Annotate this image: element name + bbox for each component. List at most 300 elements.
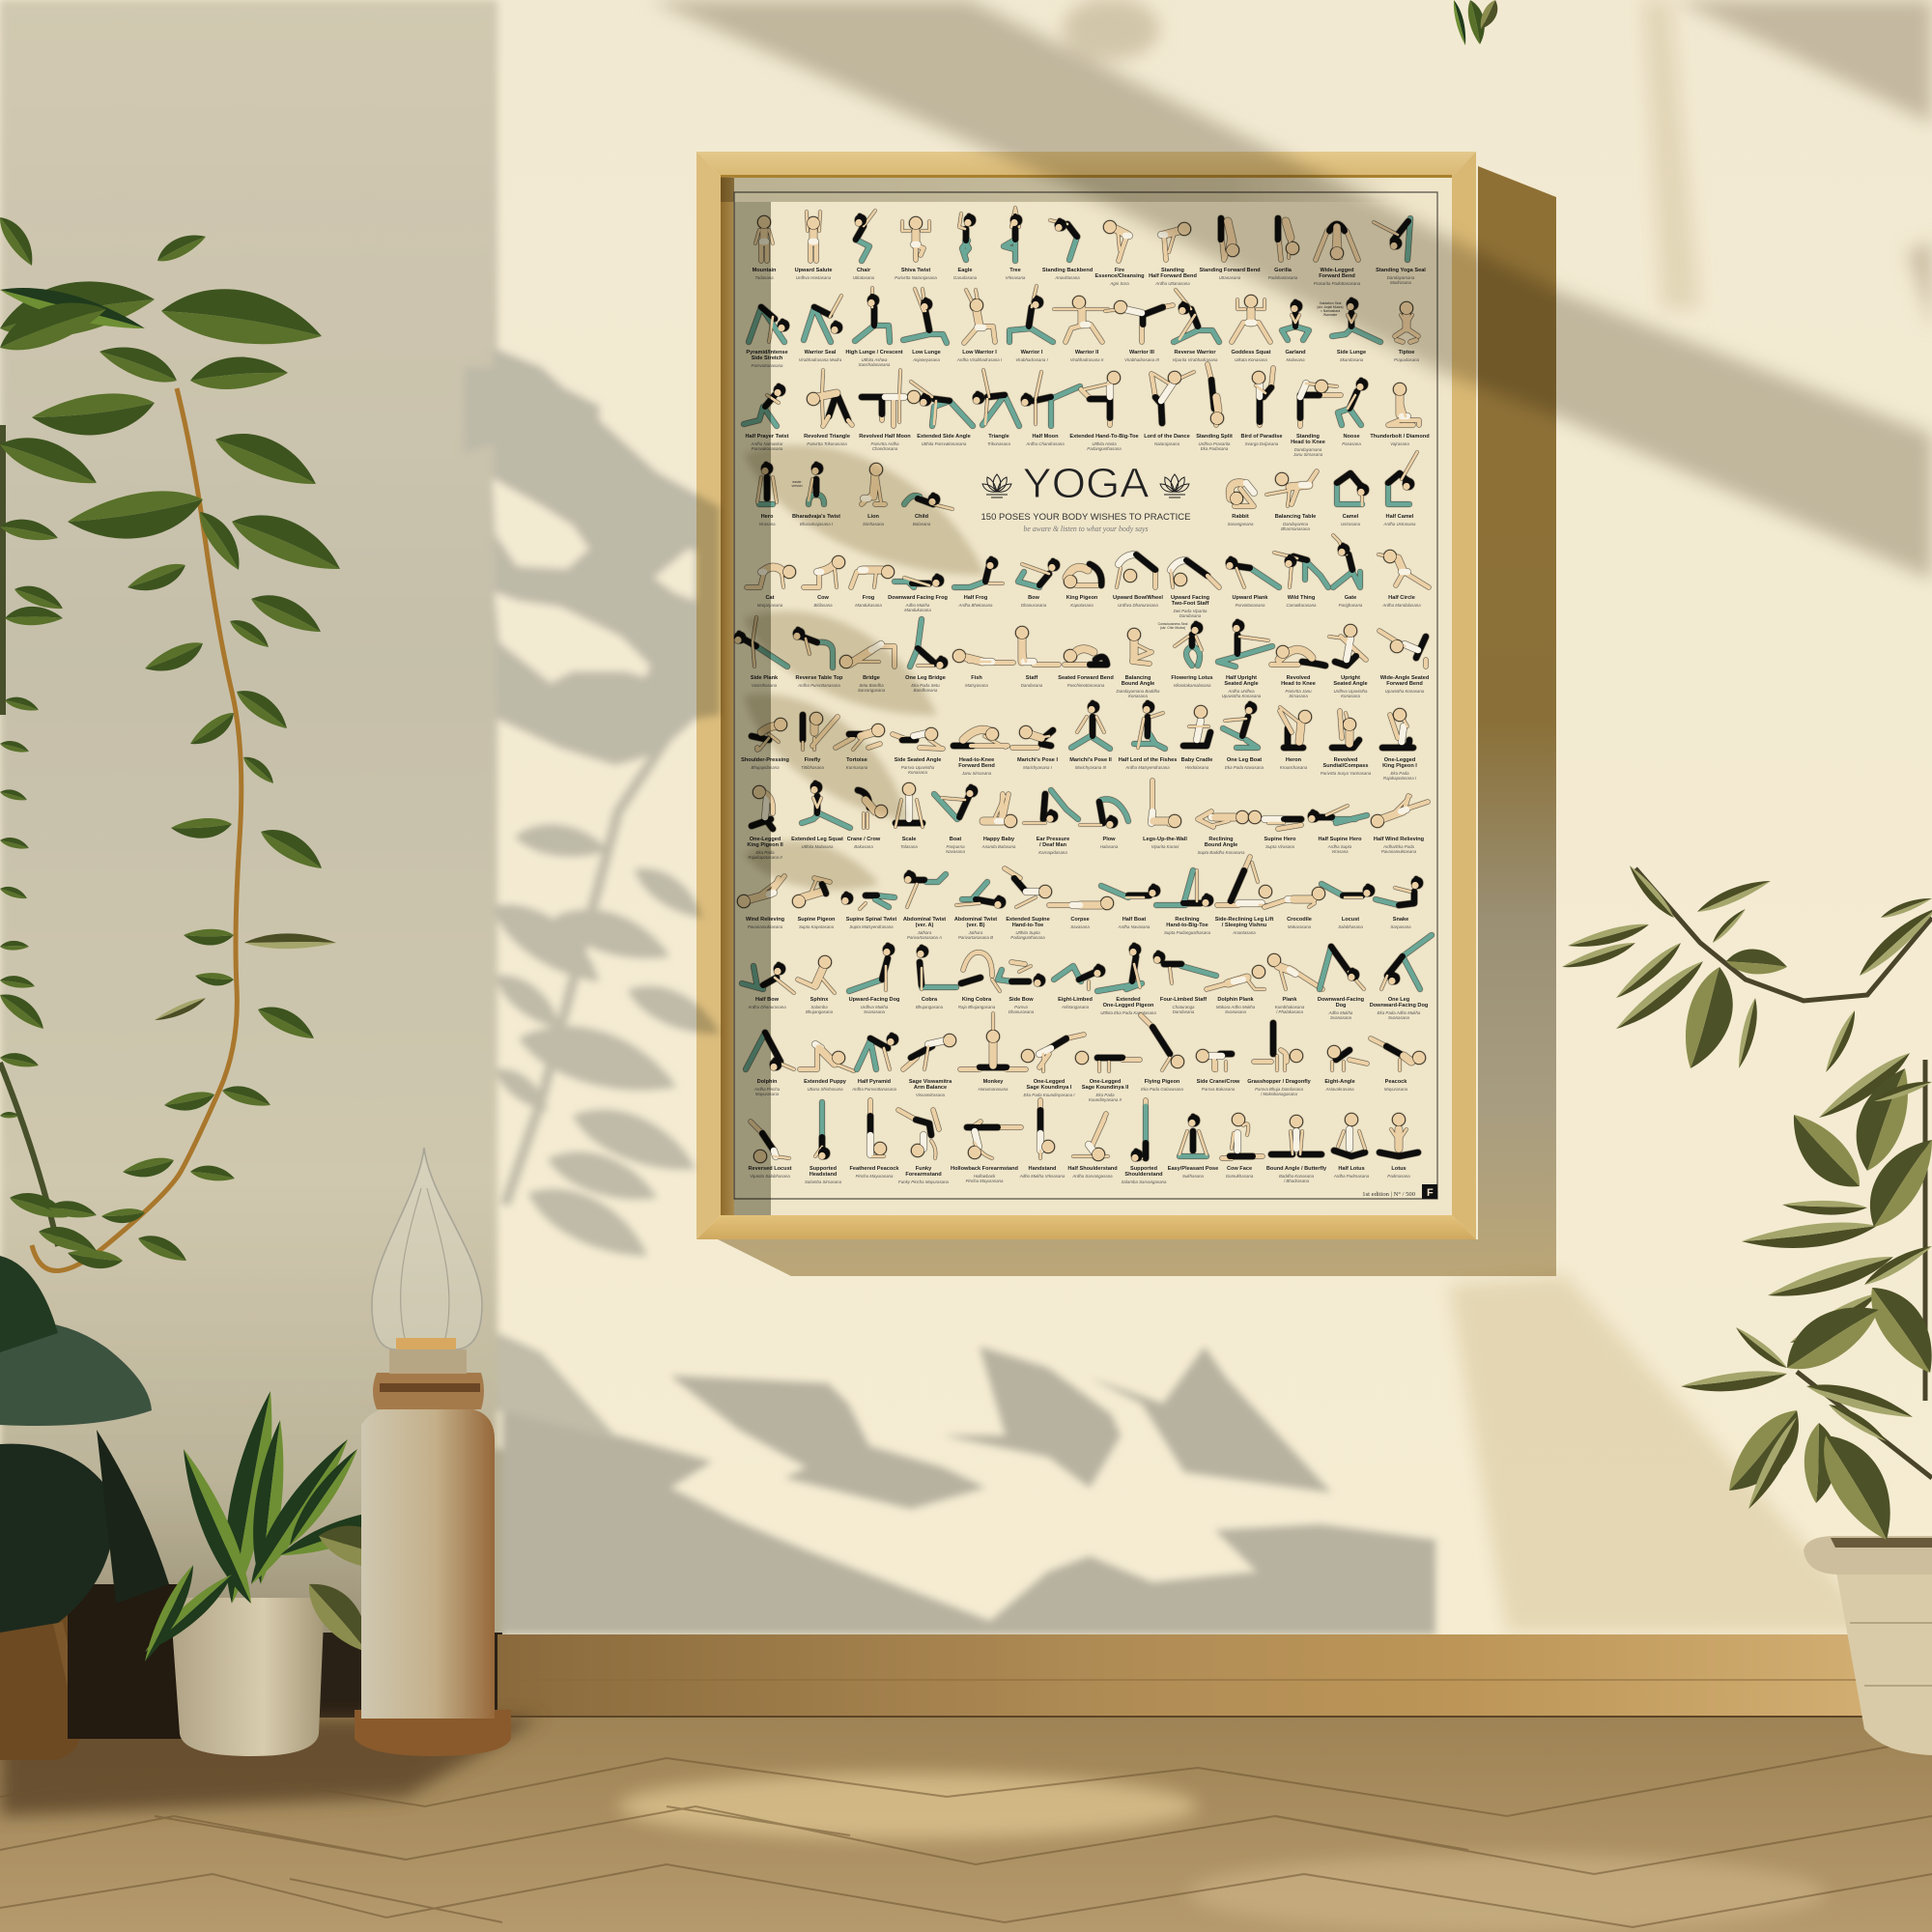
- pose: Wind Relieving: Wind Relieving: [746, 917, 785, 923]
- pose: Bound Angle / Butterfly: Baddha Konasana: [1279, 1174, 1315, 1179]
- pose: Side Seated Angle: Konasana: [908, 770, 927, 775]
- lamp column: [355, 1148, 511, 1756]
- large grey-green leaf: [0, 1321, 152, 1426]
- pose: Revolved Half Moon: [859, 370, 920, 451]
- pose: Thunderbolt / Diamond: [1370, 383, 1430, 446]
- pose: Standing Backbend: [1042, 218, 1094, 280]
- pose: Hollowback Forearmstand: Hollowback: [974, 1174, 996, 1179]
- pose: Triangle: Triangle: [988, 434, 1009, 440]
- pose: Half Pyramid: Ardha Parsvottanasana: [851, 1087, 897, 1092]
- pose: Downward-Facing Dog: Adho Mukha: [1328, 1010, 1353, 1015]
- pose: Revolved Half Moon: Parivrtta Ardha: [870, 441, 899, 446]
- pose: Goddess Squat: Utkata Konasana: [1235, 357, 1267, 362]
- pose: Supine Hero: [1248, 811, 1301, 849]
- pose: Balancing Table: [1266, 471, 1317, 531]
- pose: Bird of Paradise: Svarga Dvijasana: [1245, 441, 1279, 446]
- pose: Funky Forearmstand: Forearmstand: [905, 1172, 942, 1178]
- pose: Lotus: Padmasana: [1387, 1174, 1410, 1179]
- pose: Handstand: Handstand: [1029, 1166, 1057, 1172]
- frame left recess: [721, 177, 734, 1215]
- pose: Half Boat: Ardha Navasana: [1118, 924, 1151, 929]
- pose: Heron: [1280, 707, 1312, 770]
- annotation: salutation seal: [1317, 301, 1344, 317]
- pose: Extended Side Angle: Utthita Parsvakonasana: [922, 441, 967, 446]
- pose: Hollowback Forearmstand: Hollowback Forearmstand: [951, 1166, 1019, 1172]
- pose: Funky Forearmstand: [898, 1110, 950, 1184]
- pose: Chair: Chair: [857, 268, 871, 273]
- pose: Marichi's Pose II: [1069, 700, 1112, 770]
- poster paper: [734, 178, 1452, 1215]
- pose: Flying Pigeon: [1141, 1015, 1184, 1092]
- small hanging leaf at top: [1451, 0, 1502, 46]
- pose: Flowering Lotus: Vikasitakamalasana: [1174, 683, 1211, 688]
- pose: Gate: Gate: [1345, 595, 1356, 601]
- pose: Warrior I: Virabhadrasana I: [1015, 357, 1048, 362]
- pose: Revolved Sundial/Compass: [1321, 711, 1372, 776]
- pot rim: [1804, 1536, 1932, 1575]
- pose: Frog: Mandukasana: [855, 603, 882, 608]
- pose: Side-Reclining Leg Lift / Sleeping Vishnu: [1215, 857, 1273, 935]
- pose: Tiptoe: Tiptoe: [1399, 350, 1414, 355]
- pose: Reclining Bound Angle: Bound Angle: [1205, 842, 1237, 848]
- pose: One-Legged Sage Koundinya II: Sage Koundinya II: [1082, 1085, 1129, 1091]
- pose: Upward-Facing Dog: Upward-Facing Dog: [849, 997, 900, 1003]
- pose: One Leg Bridge: [905, 619, 948, 693]
- pose: Hollowback Forearmstand: [951, 1122, 1021, 1183]
- pose: Standing Yoga Seal: Standing Yoga Seal: [1376, 268, 1426, 273]
- pose: Half Wind Relieving: Half Wind Relieving: [1374, 837, 1425, 842]
- pose: Bow: [1018, 558, 1060, 608]
- pose: Revolved Sundial/Compass: Sundial/Compass: [1323, 763, 1368, 769]
- pose: Sage Viswamitra Arm Balance: Visvamitrasana: [916, 1093, 946, 1097]
- pose: Side Bow: Side Bow: [1009, 997, 1034, 1003]
- pose: Pyramid/Intense Side Stretch: Parsvottanasana: [752, 363, 783, 368]
- pose: One-Legged Sage Koundinya I: Sage Koundinya I: [1027, 1085, 1072, 1091]
- pose: Peacock: [1371, 1038, 1426, 1092]
- pose: Hollowback Forearmstand: Pincha Mayurasana: [966, 1179, 1004, 1183]
- pose: Marichi's Pose II: Marichi's Pose II: [1069, 757, 1112, 763]
- pose: Standing Half Forward Bend: Half Forward Bend: [1149, 273, 1197, 279]
- lower dark leaf: [97, 1430, 169, 1604]
- pose: Reclining Bound Angle: Supta Baddha Konasana: [1198, 850, 1245, 855]
- pose: Half Boat: [1101, 884, 1160, 929]
- pose: Dolphin: [746, 1033, 794, 1096]
- pose: Upright Seated Angle: Urdhva Upavistha: [1334, 689, 1368, 694]
- leaf shadows on the wall: [0, 0, 1435, 1642]
- pose: High Lunge / Crescent: Sanchalanasana: [859, 362, 891, 367]
- pose: Four-Limbed Staff: Four-Limbed Staff: [1160, 997, 1207, 1003]
- pose: Wide-Angle Seated Forward Bend: Wide-Angle Seated: [1380, 675, 1430, 681]
- pose: One-Legged King Pigeon II: Eka Pada: [755, 850, 775, 855]
- pose: Standing Head to Knee: Janu Sirsasana: [1293, 452, 1323, 457]
- pose: Cow Face: Cow Face: [1227, 1166, 1252, 1172]
- floor light patch: [618, 1774, 1198, 1839]
- pose: Side Bow: [998, 962, 1045, 1014]
- pose: Mountain: Mountain: [753, 268, 777, 273]
- pose: Half Wind Relieving: [1372, 796, 1428, 854]
- pose: Scale: Scale: [902, 837, 916, 842]
- pose: Grasshopper / Dragonfly: / Maksikanagasana: [1260, 1092, 1297, 1096]
- pose: Upward Facing Two-Foot Staff: Upward Facing: [1171, 595, 1210, 601]
- pose: Half Upright Seated Angle: [1218, 619, 1272, 698]
- pose: Crocodile: [1264, 887, 1325, 929]
- pose: Half Frog: Ardha Bhekasana: [958, 603, 993, 608]
- pose: Half Bow: [742, 962, 794, 1009]
- pose: Sphinx: [798, 956, 835, 1014]
- pose: Ear Pressure / Deaf Man: Ear Pressure: [1037, 837, 1069, 842]
- pose: Half Wind Relieving: Pavanamuktasana: [1381, 849, 1417, 854]
- pose: One Leg Downward-Facing Dog: Svanasana: [1388, 1015, 1410, 1020]
- pose: King Pigeon: Kapotasana: [1070, 603, 1094, 608]
- pose: Revolved Triangle: [804, 370, 852, 446]
- pose: King Cobra: [958, 952, 1000, 1009]
- pose: Wide-Legged Forward Bend: Forward Bend: [1319, 273, 1355, 279]
- poster inner shading: [721, 178, 1397, 1215]
- pose: Dolphin Plank: Svanasana: [1225, 1009, 1247, 1014]
- edition note: 1st edition | N° / 500: [1362, 1191, 1416, 1198]
- poster border line: [734, 192, 1437, 1199]
- vine stem: [32, 388, 242, 1271]
- lamp neck: [389, 1350, 467, 1374]
- wooden column: [361, 1409, 495, 1719]
- pose: Half Camel: [1383, 452, 1417, 526]
- plant leaves: [1560, 863, 1932, 1549]
- pose: Half Prayer Twist: Ardha Namaskar: [751, 441, 783, 446]
- pose: Eight-Limbed: Eight-Limbed: [1058, 997, 1093, 1003]
- pose: Tiptoe: [1394, 301, 1420, 362]
- pose: Warrior II: Virabhadrasana II: [1070, 357, 1104, 362]
- pose: Half Camel: Half Camel: [1386, 514, 1414, 520]
- pose: Half Pyramid: [851, 1033, 898, 1092]
- pose: Mountain: Tadasana: [754, 275, 774, 280]
- pose: Cobra: Bhujangasana: [916, 1005, 944, 1009]
- pose: Grasshopper / Dragonfly: Parsva Bhuja Dandasana: [1255, 1087, 1303, 1092]
- pose: Extended Supine Hand-to-Toe: Hand-to-Toe: [1012, 923, 1043, 928]
- pose: Extended Leg Squat: Extended Leg Squat: [791, 837, 843, 842]
- pose: Reverse Table Top: [793, 627, 843, 688]
- pose: Shoulder-Pressing: Shoulder-Pressing: [741, 757, 789, 763]
- pose: Standing Yoga Seal: [1374, 218, 1426, 285]
- pose: Marichi's Pose II: Marichyasana III: [1075, 765, 1107, 770]
- pose: Crane / Crow: [847, 790, 887, 849]
- pose: Extended Hand-To-Big-Toe: Utthita Hasta: [1092, 441, 1117, 446]
- pose: Side Plank: Side Plank: [751, 675, 779, 681]
- pose: Monkey: Hanumanasana: [978, 1087, 1009, 1092]
- pose: High Lunge / Crescent: [845, 288, 903, 367]
- pose: Warrior III: Warrior III: [1129, 350, 1154, 355]
- pose: Supported Shoulderstand: Shoulderstand: [1124, 1172, 1163, 1178]
- tagline: be aware & listen to what your body says: [1024, 525, 1148, 533]
- pose: Balancing Bound Angle: [1117, 628, 1160, 698]
- pose: Downward Facing Frog: Adho Mukha: [905, 603, 930, 608]
- collar dark ring: [380, 1383, 480, 1392]
- pose: Seated Forward Bend: Paschimottanasana: [1067, 683, 1105, 688]
- pose: Legs-Up-the-Wall: Legs-Up-the-Wall: [1143, 837, 1187, 842]
- pose: Frog: [851, 566, 895, 608]
- pose: Sphinx: Bhujangasana: [806, 1009, 834, 1014]
- pose: Warrior II: Warrior II: [1075, 350, 1099, 355]
- pose: Downward Facing Frog: Downward Facing Frog: [888, 595, 949, 601]
- pose: Noose: Noose: [1343, 434, 1360, 440]
- pose: Child: Balasana: [913, 522, 931, 526]
- pose: Extended One-Legged Pigeon: Utthita Eka Pada Kapotasana: [1100, 1010, 1156, 1015]
- pose: Warrior III: [1105, 301, 1173, 362]
- pose: Flowering Lotus: Flowering Lotus: [1171, 675, 1213, 681]
- pose: Eight-Angle: Eight-Angle: [1324, 1079, 1355, 1085]
- pose: Handstand: [1019, 1100, 1065, 1179]
- pose: Side Seated Angle: Parsva Upavistha: [901, 765, 935, 770]
- pose: Extended One-Legged Pigeon: Extended: [1116, 997, 1141, 1003]
- pose: Side Bow: Dhanurasana: [1009, 1009, 1035, 1014]
- pose: Head-to-Knee Forward Bend: [953, 728, 1008, 776]
- pose: Balancing Table: Balancing Table: [1275, 514, 1316, 520]
- large dark left leaves: [0, 1256, 169, 1633]
- pose: Baby Cradle: Hindolasana: [1185, 765, 1209, 770]
- pose: Upward Plank: Purvottanasana: [1236, 603, 1265, 608]
- lamp base: [355, 1710, 511, 1756]
- pose: Bharadvaja's Twist: [792, 462, 840, 526]
- pose: Extended Puppy: Uttana Shishosana: [807, 1087, 843, 1092]
- pose: King Pigeon: [1065, 564, 1101, 608]
- annotation: salutation seal: (skr. Anjali Mudra): [1317, 305, 1344, 309]
- pose: Locust: Locust: [1342, 917, 1359, 923]
- pose: Standing Half Forward Bend: Standing: [1161, 268, 1185, 273]
- pose: One-Legged King Pigeon II: Rajakapotasana II: [748, 855, 782, 860]
- pose: Flying Pigeon: Flying Pigeon: [1145, 1079, 1180, 1085]
- pose: Upright Seated Angle: Upright: [1341, 675, 1360, 681]
- pose: Supported Headstand: Salamba Sirsasana: [805, 1179, 842, 1184]
- pose: Side Lunge: Skandasana: [1340, 357, 1364, 362]
- pose: Head-to-Knee Forward Bend: Janu Sirsasana: [961, 771, 992, 776]
- pose: Upward-Facing Dog: [849, 943, 900, 1014]
- pose: Marichi's Pose I: Marichi's Pose I: [1017, 757, 1058, 763]
- pose: Funky Forearmstand: Funky: [916, 1166, 932, 1172]
- soft light band shadows across wall and poster: [651, 0, 1932, 1633]
- pose: Tree: Vrksasana: [1006, 275, 1026, 280]
- pose: Wild Thing: [1274, 553, 1328, 608]
- pose: Extended Hand-To-Big-Toe: Padangusthasana: [1087, 446, 1122, 451]
- pose: Standing Forward Bend: [1199, 218, 1261, 280]
- pose: Reclining Bound Angle: Reclining: [1208, 837, 1234, 842]
- pose: Firefly: [801, 713, 838, 770]
- pose: Extended Side Angle: [911, 382, 973, 446]
- pose: Abdominal Twist (ver. B): Parivartanasana B: [958, 935, 993, 940]
- pose: Half Supine Hero: Virasana: [1331, 849, 1349, 854]
- pose: Abdominal Twist (ver. A): Jathara: [917, 930, 932, 935]
- pose: Side-Reclining Leg Lift / Sleeping Vishnu: / Sleeping Vishnu: [1222, 923, 1267, 928]
- pose: Standing Split: Urdhva Prasarita: [1199, 441, 1231, 446]
- pose: Supine Spinal Twist: Supta Matsyendrasana: [849, 924, 894, 929]
- pose: One-Legged Sage Koundinya I: [1022, 1035, 1084, 1097]
- pose: Cow: [804, 556, 844, 608]
- pose: Camel: [1337, 473, 1369, 526]
- pose: Half Bow: Half Bow: [755, 997, 780, 1003]
- pose: Bound Angle / Butterfly: Bound Angle / Butterfly: [1266, 1166, 1327, 1172]
- pose: One-Legged Sage Koundinya II: Eka Pada: [1095, 1093, 1115, 1097]
- pose: Extended Puppy: Extended Puppy: [804, 1079, 847, 1085]
- pose: Cobra: [916, 945, 956, 1009]
- pose: Triangle: Trikonasana: [987, 441, 1010, 446]
- pot body: [1835, 1567, 1932, 1755]
- frame drop shadow on the wall: [718, 166, 1556, 1276]
- pose: Head-to-Knee Forward Bend: Head-to-Knee: [959, 757, 994, 763]
- pose: Shoulder-Pressing: Bhujapidasana: [751, 765, 780, 770]
- pose: Dolphin Plank: Makara Adho Mukha: [1216, 1005, 1256, 1009]
- pose: Revolved Head to Knee: Sirsasana: [1289, 694, 1308, 698]
- warm filament base: [396, 1338, 456, 1350]
- pose: Peacock: Mayurasana: [1384, 1087, 1408, 1092]
- pose: Marichi's Pose I: Marichyasana I: [1023, 765, 1053, 770]
- pose: Upward Salute: [795, 212, 832, 280]
- pose: Sphinx: Salamba: [810, 1005, 828, 1009]
- vine leaves: [30, 227, 350, 1272]
- pose: Lotus: [1379, 1113, 1418, 1179]
- pose: Supported Headstand: Supported: [810, 1166, 838, 1172]
- subtitle: 150 POSES YOUR BODY WISHES TO PRACTICE: [981, 512, 1190, 523]
- pose: Gorilla: Padahastasana: [1268, 275, 1298, 280]
- pose: Happy Baby: Happy Baby: [983, 837, 1015, 842]
- pose: Head-to-Knee Forward Bend: Forward Bend: [958, 763, 995, 769]
- pose: Firefly: Tittibhasana: [801, 765, 824, 770]
- pose: Half Moon: [1021, 372, 1080, 446]
- plant stems: [1635, 868, 1932, 1478]
- pose: Hero: Virasana: [758, 522, 776, 526]
- pose: Half Prayer Twist: [744, 384, 789, 451]
- pose: Lord of the Dance: Lord of the Dance: [1144, 434, 1190, 440]
- pose: One-Legged Sage Koundinya II: Koundinyasana II: [1089, 1097, 1122, 1102]
- pose: Noose: Pasasana: [1342, 441, 1361, 446]
- pose: Balancing Table: Dandayamna: [1283, 522, 1309, 526]
- pose: Corpse: Corpse: [1070, 917, 1090, 923]
- pose: Lion: Lion: [867, 514, 879, 520]
- pose: Side Crane/Crow: Side Crane/Crow: [1197, 1079, 1240, 1085]
- pose: Revolved Head to Knee: Parivrtta Janu: [1285, 689, 1312, 694]
- pose: Extended Puppy: [800, 1044, 854, 1092]
- pose: Standing Head to Knee: Dandayamana: [1294, 447, 1322, 452]
- pose: Side Crane/Crow: [1196, 1049, 1240, 1092]
- pose: Side Lunge: [1332, 298, 1380, 362]
- pose: Upward Salute: Upward Salute: [795, 268, 832, 273]
- pose: King Pigeon: King Pigeon: [1066, 595, 1098, 601]
- pose: Bridge: [840, 644, 895, 693]
- pose: Eight-Limbed: [1054, 964, 1105, 1009]
- pose: Thunderbolt / Diamond: Vajrasana: [1390, 441, 1409, 446]
- pose: Warrior II: [1054, 296, 1108, 362]
- pose: Standing Half Forward Bend: [1149, 222, 1197, 286]
- baseboard: [497, 1634, 1869, 1719]
- pose: Upward Facing Two-Foot Staff: Dandasana: [1179, 613, 1202, 618]
- pose: One-Legged Sage Koundinya II: [1076, 1051, 1140, 1102]
- publisher corner badge: [1422, 1184, 1437, 1199]
- pose: One-Legged Sage Koundinya I: One-Legged: [1034, 1079, 1065, 1085]
- pose: Side-Reclining Leg Lift / Sleeping Vishnu: Anantasana: [1232, 930, 1256, 935]
- pose: Corpse: [1049, 896, 1113, 929]
- pose: Hero: Hero: [761, 514, 774, 520]
- pose: Upward-Facing Dog: Svanasana: [864, 1009, 886, 1014]
- pose: Lord of the Dance: Natarajasana: [1154, 441, 1180, 446]
- pose: One-Legged King Pigeon II: [747, 786, 783, 860]
- pose: Sage Viswamitra Arm Balance: Arm Balance: [914, 1085, 947, 1091]
- pose: Noose: [1338, 378, 1368, 446]
- pose: Grasshopper / Dragonfly: Grasshopper / Dragonfly: [1247, 1079, 1312, 1085]
- pose: Revolved Sundial/Compass: Parivrtta Surya Yantrasana: [1321, 771, 1372, 776]
- pose: Fire Essence/Cleansing: Agni Sara: [1109, 281, 1129, 286]
- pose: Standing Head to Knee: Head to Knee: [1291, 440, 1325, 445]
- pose: Legs-Up-the-Wall: Viparita Karani: [1151, 844, 1179, 849]
- pose: Supported Shoulderstand: Supported: [1130, 1166, 1158, 1172]
- pose: Half Supine Hero: [1308, 806, 1367, 854]
- pose: Abdominal Twist (ver. A): (ver. A): [916, 923, 934, 928]
- pose: One Leg Boat: Eka Pada Navasana: [1225, 765, 1264, 770]
- pose: Standing Forward Bend: Uttanasana: [1219, 275, 1241, 280]
- pose: Staff: Dandasana: [1021, 683, 1043, 688]
- pose: Cow: Cow: [817, 595, 830, 601]
- pose: Chair: [853, 211, 875, 280]
- pose: Snake: Snake: [1393, 917, 1408, 923]
- edge plant leaves: [0, 211, 158, 1258]
- pose: Warrior III: Virabhadrasana III: [1124, 357, 1160, 362]
- pose: Standing Yoga Seal: Mudrasana: [1390, 280, 1412, 285]
- pose: Dolphin Plank: [1207, 966, 1265, 1014]
- pose: Downward-Facing Dog: Downward-Facing: [1318, 997, 1365, 1003]
- pose: Extended One-Legged Pigeon: [1097, 943, 1156, 1015]
- pose: Half Shoulderstand: Half Shoulderstand: [1067, 1166, 1118, 1172]
- pose: Tortoise: [836, 724, 885, 770]
- pose: Handstand: Adho Mukha Vrksasana: [1019, 1174, 1065, 1179]
- pose: Side Seated Angle: Side Seated Angle: [895, 757, 941, 763]
- pose: Eight-Angle: Astavakrasana: [1324, 1087, 1354, 1092]
- pose: Bridge: Sarvangasana: [858, 688, 886, 693]
- pose: Wide-Legged Forward Bend: [1314, 224, 1361, 286]
- parquet chevron lines: [0, 1739, 1932, 1927]
- pose: Downward Facing Frog: [888, 574, 949, 612]
- pose: Feathered Peacock: Feathered Peacock: [850, 1166, 899, 1172]
- pose: Pyramid/Intense Side Stretch: Pyramid/Intense: [746, 350, 788, 355]
- pose: Flying Pigeon: Eka Pada Galavasana: [1141, 1087, 1183, 1092]
- publisher corner badge: F: [1427, 1187, 1434, 1199]
- pose: Bharadvaja's Twist: easier: [792, 480, 802, 484]
- pose: Eight-Limbed: Ashtangasana: [1061, 1005, 1090, 1009]
- annotation: salutation seal: Salutation Seal: [1320, 301, 1342, 305]
- cream planter: [170, 1598, 325, 1756]
- pose: Staff: Staff: [1026, 675, 1037, 681]
- pose: Supine Spinal Twist: Supine Spinal Twist: [846, 917, 896, 923]
- pose: Sage Viswamitra Arm Balance: Sage Viswamitra: [909, 1079, 952, 1085]
- pose: One-Legged King Pigeon I: One-Legged: [1384, 757, 1416, 763]
- pose: Garland: Malasana: [1286, 357, 1305, 362]
- pose: Pyramid/Intense Side Stretch: Side Stretch: [752, 355, 783, 361]
- pose: Standing Half Forward Bend: Ardha Uttanasana: [1154, 281, 1190, 286]
- pose: Half Upright Seated Angle: Half Upright: [1226, 675, 1257, 681]
- pose: Abdominal Twist (ver. A): [903, 870, 946, 940]
- pose: Frog: Frog: [863, 595, 875, 601]
- pose: Balancing Bound Angle: Bound Angle: [1122, 681, 1154, 687]
- pose: Child: Child: [915, 514, 929, 520]
- pose: Staff: [1016, 626, 1059, 688]
- pose: Gorilla: [1268, 218, 1298, 280]
- pose: Reverse Table Top: Reverse Table Top: [796, 675, 843, 681]
- pose: Extended Supine Hand-to-Toe: Extended Supine: [1006, 917, 1050, 923]
- pose: Hero: [757, 462, 777, 526]
- faint leaf shadows on the poster: [726, 409, 1008, 902]
- pose: Dolphin Plank: Dolphin Plank: [1217, 997, 1255, 1003]
- right pot: [1804, 1536, 1932, 1755]
- large black-green leaf: [0, 1444, 115, 1633]
- pose: Lion: [862, 464, 885, 526]
- pose: Low Warrior I: Ardha Virabhadrasana I: [956, 357, 1003, 362]
- pose: Bound Angle / Butterfly: / Bhadrasana: [1283, 1179, 1310, 1183]
- pose: Side-Reclining Leg Lift / Sleeping Vishnu: Side-Reclining Leg Lift: [1215, 917, 1273, 923]
